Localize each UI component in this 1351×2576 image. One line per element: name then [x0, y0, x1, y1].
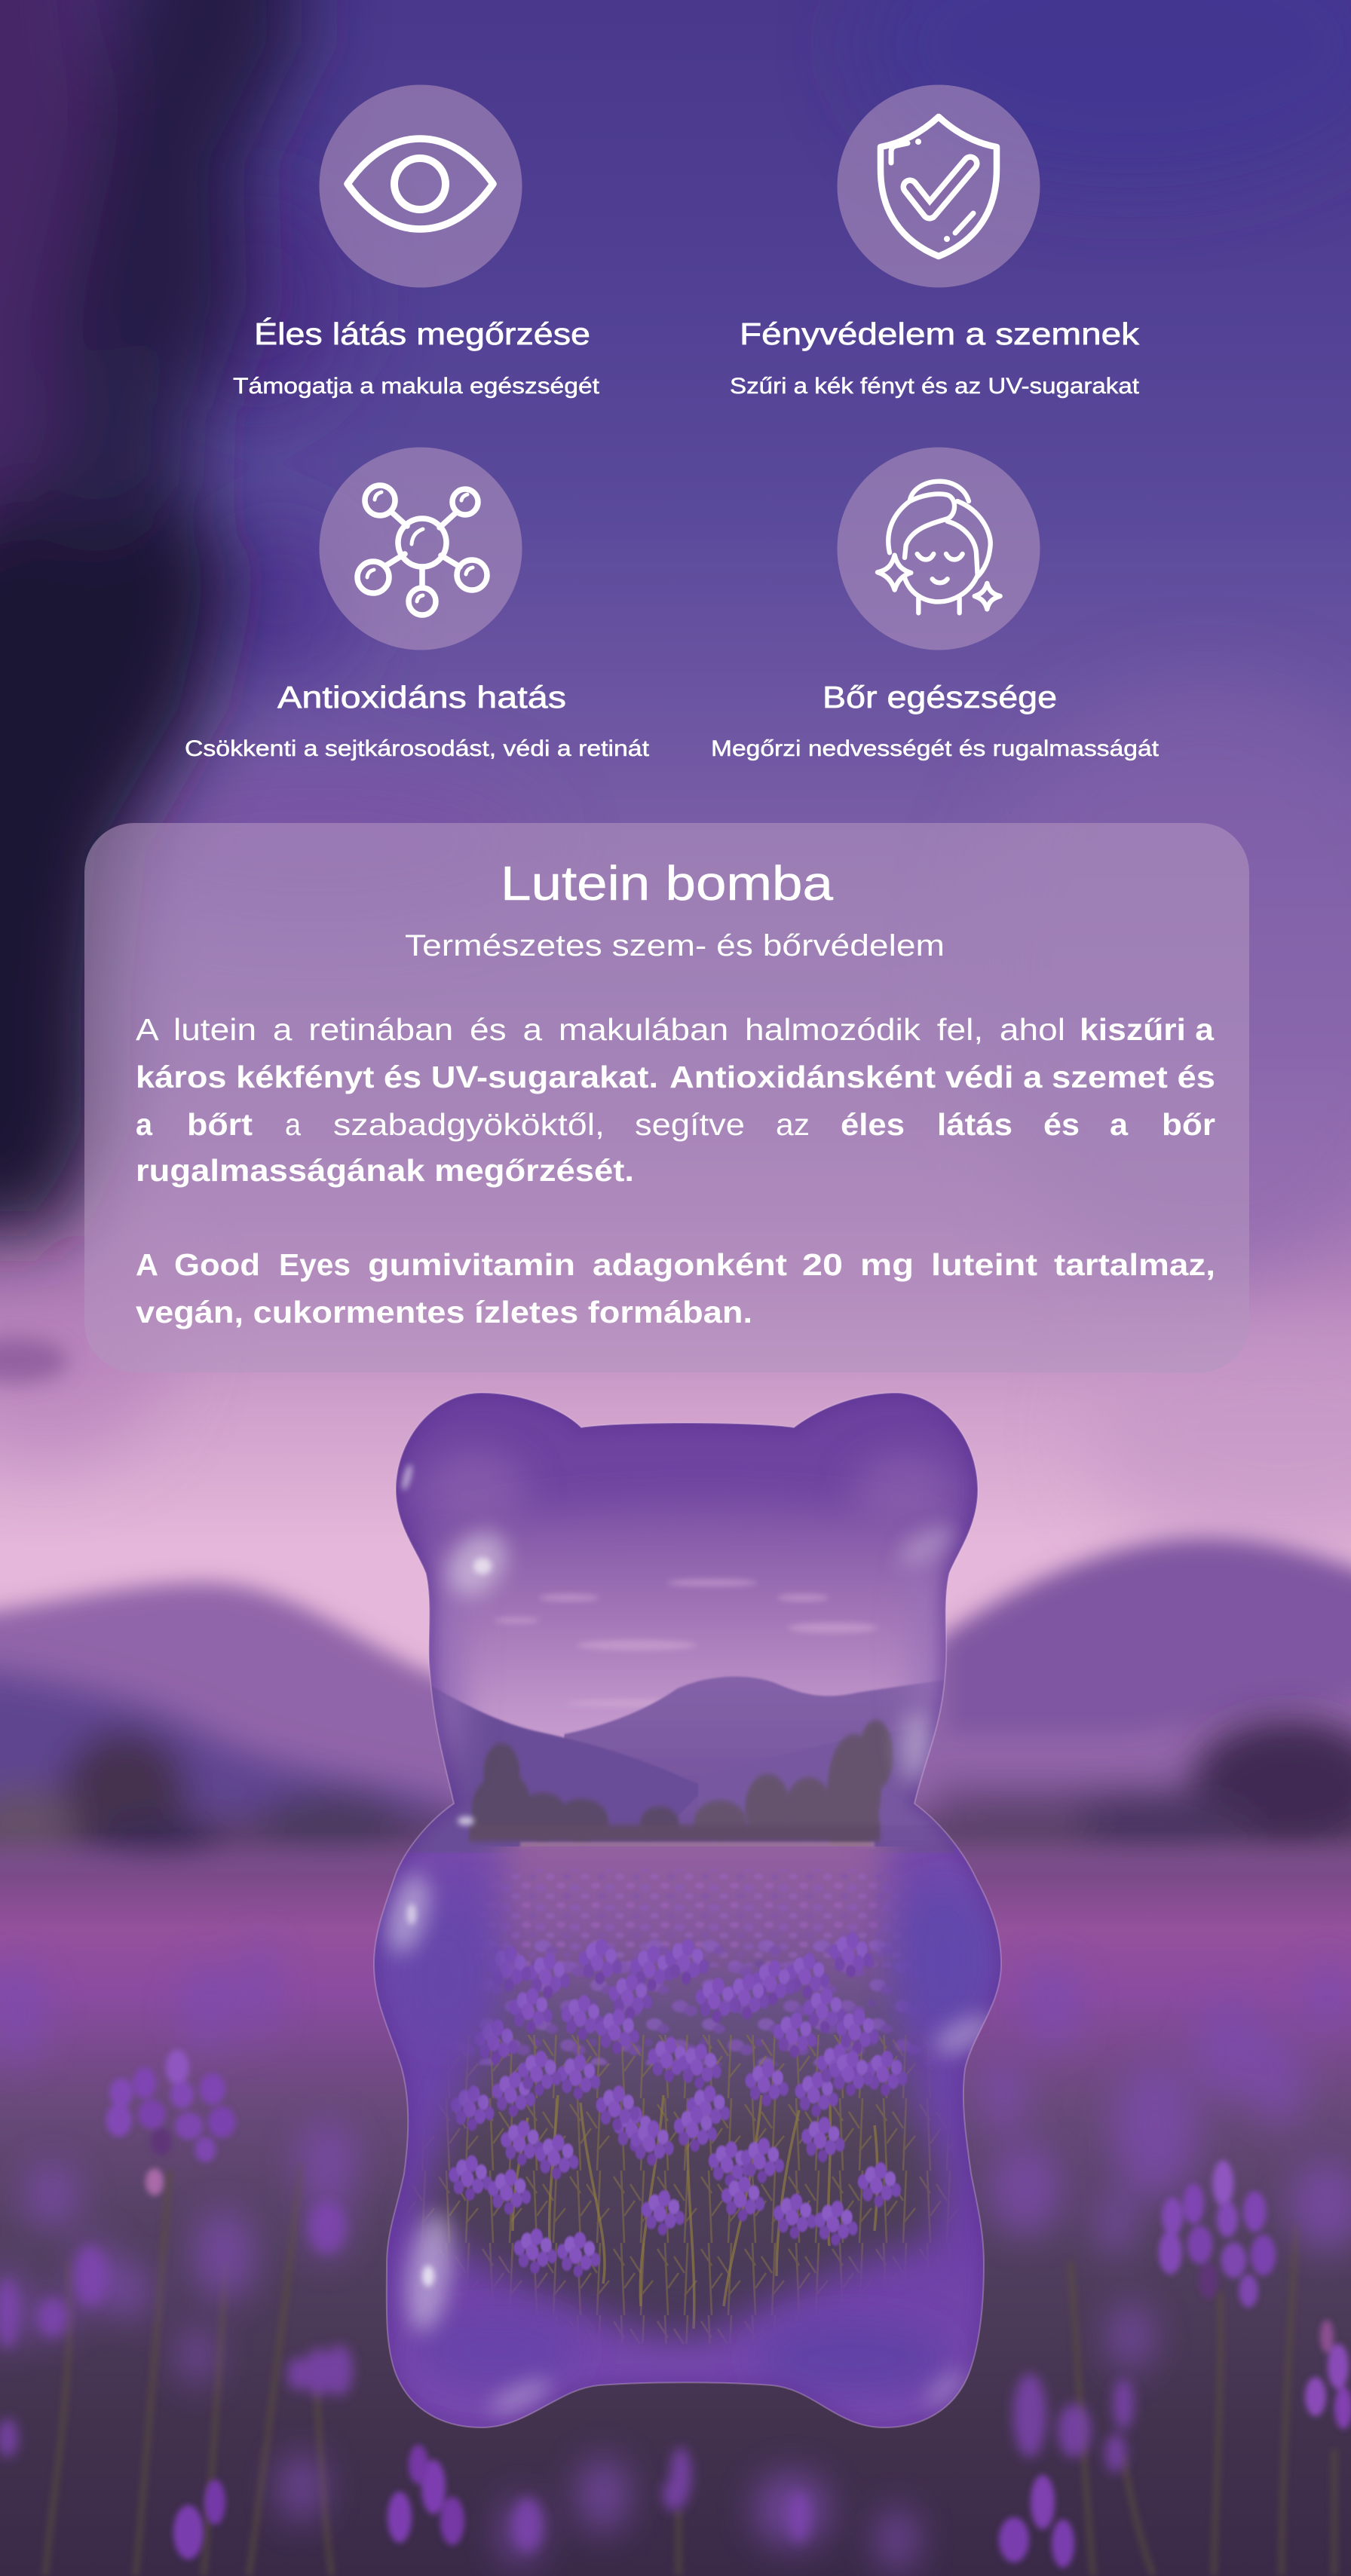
sky colour washes [0, 0, 1351, 1553]
paragraph: lutein function: látás [937, 1107, 1012, 1142]
paragraph: lutein function: bőr [1162, 1107, 1215, 1142]
distant tree line [0, 1666, 1351, 1875]
clouds [494, 1579, 878, 1707]
paragraph: Good Eyes product: Eyes [279, 1247, 351, 1282]
paragraph: Good Eyes product: tartalmaz, [1054, 1247, 1215, 1282]
in-focus background flowers [106, 2050, 1351, 2568]
paragraph: lutein function: segítve [635, 1107, 745, 1142]
bear rim light [374, 1393, 1001, 2428]
feature: antioxidant effect [185, 448, 650, 761]
paragraph: lutein function: kiszűri a [1080, 1012, 1215, 1047]
paragraph: lutein function: a [1110, 1107, 1129, 1142]
paragraph: lutein function: A lutein a retinában és a makulában halmozódik fel, ahol [136, 1012, 1065, 1047]
lavender field inside bear [377, 1846, 995, 2374]
icon: eye [320, 84, 522, 288]
paragraph: lutein function: bőrt [187, 1107, 253, 1142]
text block: Csökkenti a sejtkárosodást, védi a retinát [185, 736, 650, 761]
meadow strip [520, 1842, 875, 1849]
paragraph: lutein function: káros kékfényt és UV-sugarakat. [136, 1060, 658, 1094]
paragraph: Good Eyes product: 20 [802, 1247, 843, 1282]
paragraph: lutein function: Antioxidánsként védi a szemet és [669, 1060, 1215, 1094]
inner shading [400, 1545, 988, 2397]
text block: Megőrzi nedvességét és rugalmasságát [711, 736, 1160, 761]
panel: Lutein bomba [84, 823, 1249, 1372]
heading: Fényvédelem a szemnek [740, 317, 1140, 351]
heading: Bőr egészsége [823, 680, 1057, 714]
paragraph: Good Eyes product: luteint [931, 1247, 1037, 1282]
paragraph: lutein function: szabadgyököktől, [333, 1107, 605, 1142]
paragraph: Good Eyes product: Good [174, 1247, 260, 1282]
paragraph: lutein function: rugalmasságának megőrzését. [136, 1153, 634, 1188]
paragraph: Good Eyes product: mg [860, 1247, 914, 1282]
blurred stems [45, 2163, 1334, 2576]
stems [407, 2035, 980, 2344]
paragraph: Good Eyes product [136, 1247, 1215, 1329]
icon: molecule [320, 448, 522, 650]
icon: face with towel and sparkles [837, 448, 1040, 650]
paragraph: lutein function: az [776, 1107, 810, 1142]
gummy bear with landscape inside [362, 1379, 1010, 2442]
paragraph: Good Eyes product: vegán, cukormentes ízletes formában. [136, 1295, 752, 1329]
highlights [381, 1519, 1001, 2420]
feature: sharp vision [233, 84, 600, 399]
text block: Szűri a kék fényt és az UV-sugarakat [730, 374, 1140, 399]
distant mountains [0, 1537, 1351, 1990]
panel heading: Lutein bomba [501, 856, 833, 910]
distant flower rows [377, 1869, 995, 1967]
sky window in head [433, 1501, 952, 1739]
panel subtitle: Természetes szem- és bőrvédelem [405, 929, 945, 962]
paragraph: lutein function: a [136, 1107, 153, 1142]
paragraph: Good Eyes product: gumivitamin [368, 1247, 575, 1282]
dark blurred tree, upper left [0, 0, 302, 1236]
paragraph: lutein function: éles [841, 1107, 905, 1142]
heading: Antioxidáns hatás [277, 680, 566, 714]
paragraph: Good Eyes product: adagonként [593, 1247, 787, 1282]
heading: Éles látás megőrzése [254, 317, 590, 351]
paragraph: Good Eyes product: A [136, 1247, 158, 1282]
paragraph: lutein function [136, 1012, 1215, 1188]
paragraph: lutein function: a [285, 1107, 301, 1142]
trees inside bear [469, 1720, 893, 1850]
far out-of-focus flowers [0, 1937, 1351, 2573]
mid-focus flowers [0, 2202, 1134, 2552]
icon: shield with check [837, 84, 1040, 288]
lavender field ground [0, 1831, 1351, 2576]
bear body base [362, 1379, 1010, 2442]
paragraph: lutein function: és [1043, 1107, 1080, 1142]
mountains inside bear [404, 1672, 954, 1852]
ear glass tones [421, 1447, 959, 1528]
text block: Támogatja a makula egészségét [233, 374, 600, 399]
flower clusters [449, 1932, 908, 2278]
feature: light protection [730, 84, 1140, 399]
feature: skin health [711, 448, 1160, 761]
